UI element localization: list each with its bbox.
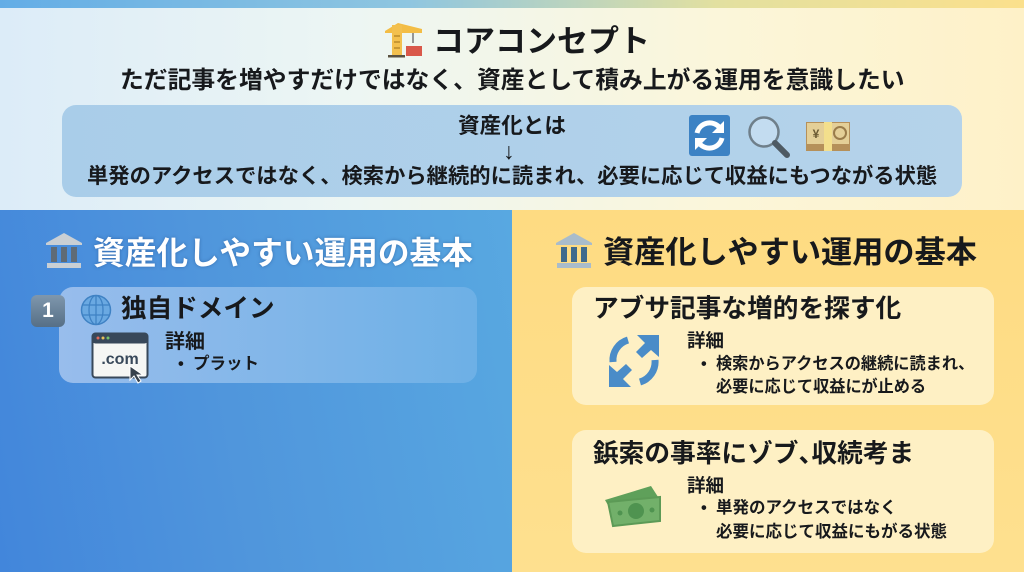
detail bullets: 必要に応じて収益にもがる状態 (716, 523, 947, 541)
icon: yen banknotes: ¥ (813, 127, 820, 141)
icon: yen banknotes (806, 122, 850, 151)
callout: definition of assetization (62, 105, 962, 197)
card: lower (572, 430, 994, 553)
icon: bank (46, 233, 82, 268)
icon: .com browser window (92, 332, 148, 384)
icon: .com browser window: .com (101, 351, 139, 368)
detail label: 詳細 (687, 330, 724, 351)
card heading: アブサ記事な増的を探す化 (593, 295, 901, 323)
detail bullets: • (701, 499, 707, 517)
icon: banknotes (605, 486, 661, 528)
left heading: 資産化しやすい運用の基本 (93, 235, 473, 271)
detail bullets: • (701, 355, 707, 373)
right heading: 資産化しやすい運用の基本 (603, 235, 977, 270)
icon: crane (385, 23, 422, 58)
icon: cycle arrows (609, 335, 659, 387)
icon: bank (556, 233, 592, 268)
card: upper (572, 287, 994, 405)
callout text: 単発のアクセスではなく、検索から継続的に読まれ、必要に応じて収益にもつながる状態 (87, 164, 937, 188)
callout heading: 資産化とは (458, 113, 566, 138)
icon: magnifying glass (748, 116, 790, 158)
detail label: 詳細 (165, 331, 205, 353)
icon: refresh (689, 115, 730, 156)
panel: right yellow (512, 210, 1024, 572)
top colour bar (0, 0, 1024, 8)
detail bullets: 検索からアクセスの継続に読まれ、 (716, 355, 974, 373)
title: コアコンセプト (433, 24, 650, 59)
detail bullets: 必要に応じて収益にが止める (716, 378, 926, 396)
detail label: 詳細 (687, 475, 724, 496)
icon: globe (80, 294, 112, 326)
card heading: 独自ドメイン (121, 295, 275, 323)
subtitle: ただ記事を増やすだけではなく、資産として積み上がる運用を意識したい (120, 67, 905, 94)
panel: left blue (0, 210, 512, 572)
detail bullets (701, 354, 974, 396)
detail bullets: 単発のアクセスではなく (716, 499, 897, 517)
panel: core concept (0, 8, 1024, 210)
detail bullets (701, 498, 947, 541)
badge: number 1 (31, 295, 65, 327)
card: own domain (59, 287, 477, 383)
badge: number 1: 1 (42, 299, 54, 322)
card heading: 鋲索の事率にゾブ、収続考ま (593, 440, 914, 468)
detail bullet: • プラット (178, 355, 259, 373)
arrow: down: ↓ (503, 138, 514, 164)
